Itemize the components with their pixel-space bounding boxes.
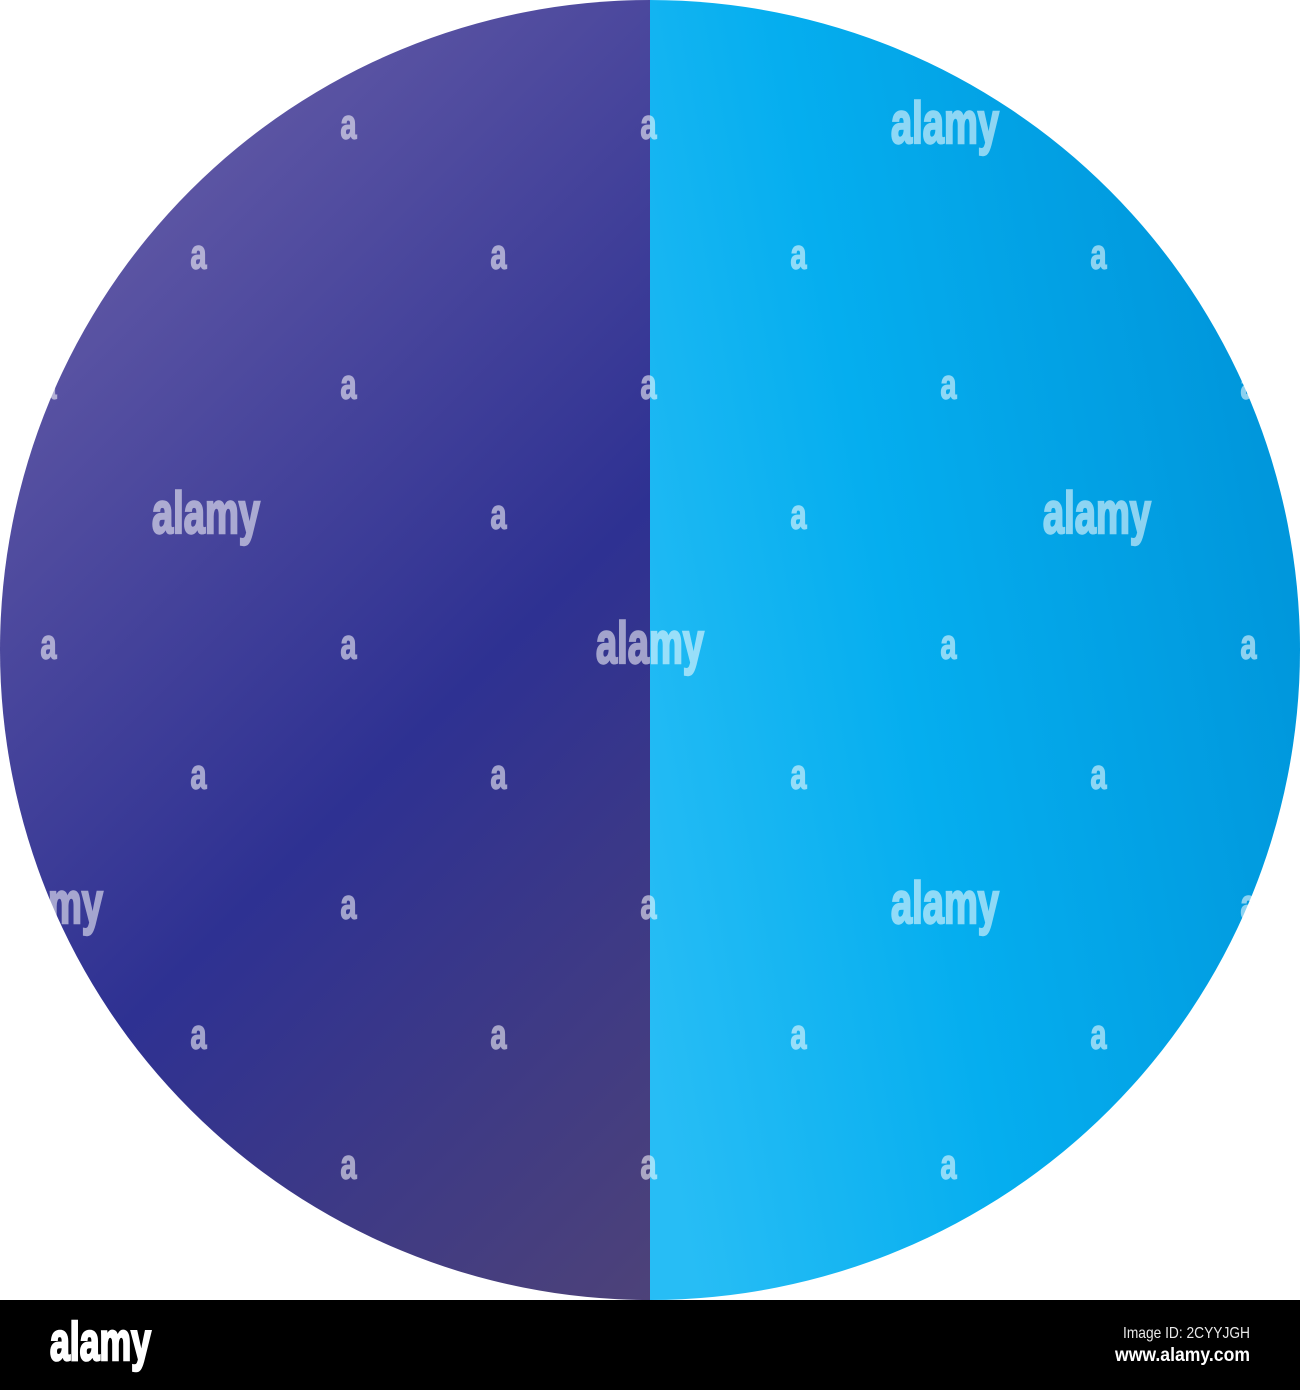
watermark wordmark: alamy	[891, 91, 999, 156]
small watermark letters: a	[1240, 620, 1257, 668]
small watermark letters: a	[490, 750, 507, 798]
small watermark letters: a	[1090, 1010, 1107, 1058]
watermark: repeated alamy marks	[0, 91, 1257, 1188]
right half of pie: light blue	[650, 0, 1300, 1300]
small watermark letters: a	[640, 1140, 657, 1188]
left half of pie: dark indigo	[0, 0, 650, 1300]
watermark wordmark: alamy	[152, 481, 260, 546]
small watermark letters: a	[190, 1010, 207, 1058]
watermark wordmark: alamy	[891, 871, 999, 936]
watermark wordmark: alamy	[1043, 481, 1151, 546]
small watermark letters: a	[490, 230, 507, 278]
watermark wordmark: alamy	[596, 611, 704, 676]
small watermark letters: a	[1090, 230, 1107, 278]
small watermark letters: a	[790, 750, 807, 798]
small watermark letters: a	[40, 620, 57, 668]
small watermark letters: a	[940, 1140, 957, 1188]
small watermark letters: a	[790, 230, 807, 278]
small watermark letters: a	[340, 1140, 357, 1188]
small watermark letters: a	[190, 230, 207, 278]
small watermark letters: a	[1240, 360, 1257, 408]
small watermark letters: a	[1240, 880, 1257, 928]
small watermark letters: a	[640, 100, 657, 148]
small watermark letters: a	[790, 490, 807, 538]
small watermark letters: a	[940, 360, 957, 408]
small watermark letters: a	[940, 620, 957, 668]
small watermark letters: a	[340, 360, 357, 408]
small watermark letters: a	[490, 490, 507, 538]
website address: www.alamy.com	[1114, 1345, 1250, 1366]
small watermark letters: a	[490, 1010, 507, 1058]
small watermark letters: a	[640, 880, 657, 928]
small watermark letters	[40, 100, 1257, 1188]
small watermark letters: a	[190, 750, 207, 798]
footer background	[0, 1300, 1300, 1390]
image id: Image ID: 2CYYJGH	[1123, 1325, 1250, 1342]
small watermark letters: a	[340, 100, 357, 148]
small watermark letters: a	[340, 880, 357, 928]
small watermark letters: a	[340, 620, 357, 668]
small watermark letters: a	[640, 360, 657, 408]
footer logo: alamy	[50, 1312, 151, 1372]
small watermark letters: a	[790, 1010, 807, 1058]
small watermark letters: a	[40, 360, 57, 408]
small watermark letters: a	[1090, 750, 1107, 798]
footer bar	[0, 1300, 1300, 1390]
